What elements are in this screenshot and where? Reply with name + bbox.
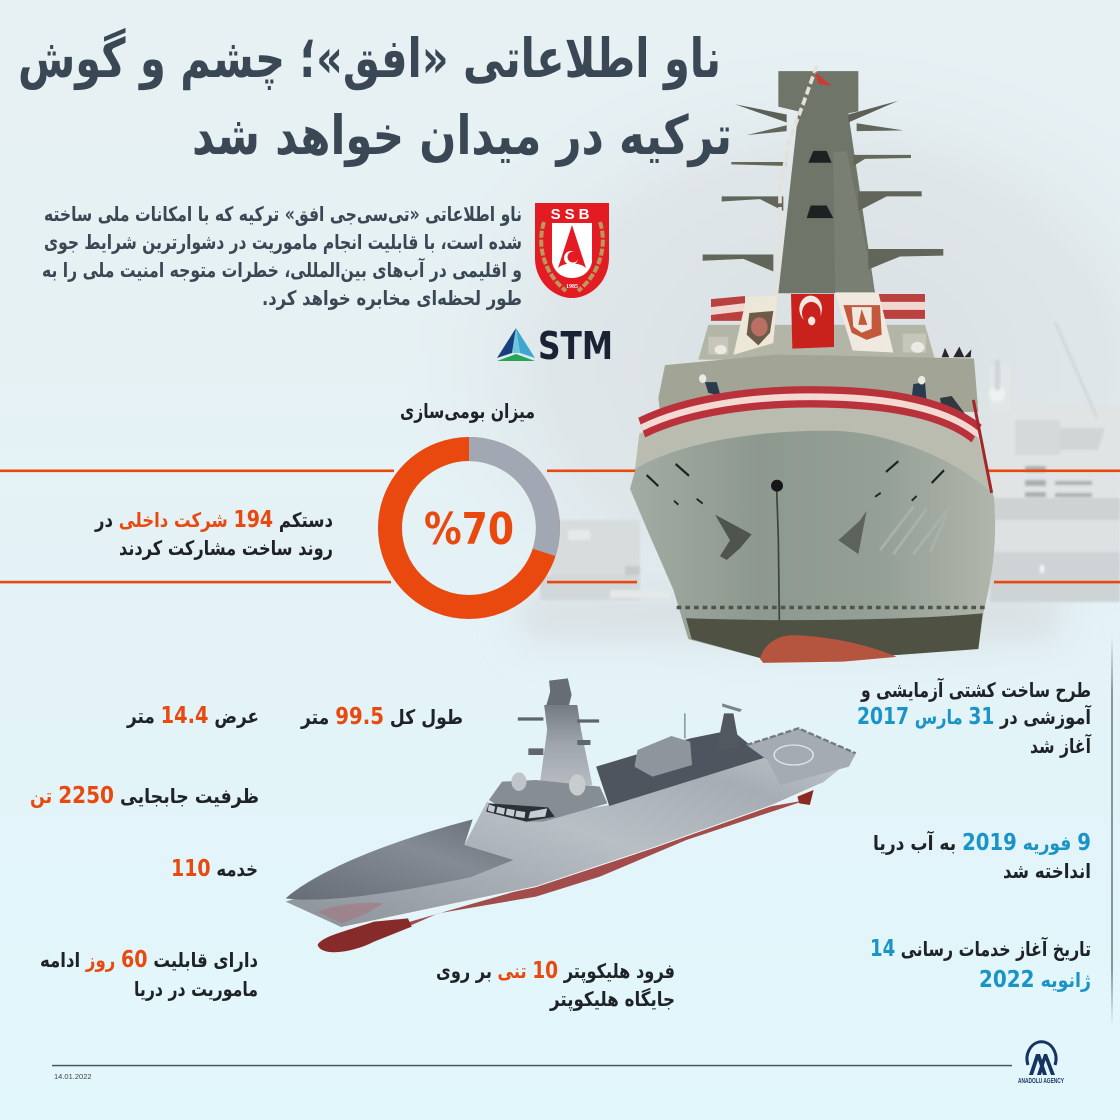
- orange horizontal rules: [0, 470, 1120, 583]
- footer rule: [52, 1065, 1012, 1066]
- logo: Anadolu Agency: ANADOLU AGENCY: [1018, 1078, 1064, 1085]
- dressing flags on mast: [772, 66, 817, 376]
- logo: Anadolu Agency: [1018, 1042, 1064, 1085]
- spec: beam: عرض 14.4 متر: [126, 703, 259, 729]
- boot topping: [686, 613, 983, 659]
- logo: SSB shield: SSB: [551, 206, 593, 223]
- title: ترکیه در میدان خواهد شد: [192, 104, 732, 167]
- bow red tint: [318, 903, 383, 923]
- timeline: construction start: آموزشی در 31 مارس 2017: [857, 704, 1092, 730]
- title: ناو اطلاعاتی «افق»؛ چشم و گوش: [18, 27, 721, 90]
- timeline: launch: [873, 830, 1091, 883]
- main mast: [518, 678, 599, 785]
- hull side: [286, 728, 856, 927]
- upper superstructure: [698, 325, 935, 360]
- spec: overall length: طول کل 99.5 متر: [300, 704, 463, 730]
- red and white rails: [711, 294, 925, 321]
- intro paragraph: ناو اطلاعاتی «تی‌سی‌جی افق» ترکیه که با امکانات ملی ساخته: [44, 202, 522, 226]
- spec: crew: خدمه 110: [171, 856, 258, 882]
- hull: [630, 418, 995, 659]
- spec: helicopter: جایگاه هلیکوپتر: [549, 987, 675, 1012]
- anchors and hawse hole: [715, 480, 867, 560]
- red bulbous bow: [760, 635, 897, 663]
- hull markings: [647, 461, 944, 645]
- spec: displacement: ظرفیت جابجایی 2250 تن: [30, 783, 259, 809]
- hull shoulder band: [635, 406, 992, 493]
- bridge and radome: [486, 772, 607, 822]
- date: 14.01.2022: [54, 1072, 92, 1081]
- banner left: [733, 296, 777, 355]
- timeline: construction start: آغاز شد: [1030, 733, 1092, 758]
- spec: endurance: [40, 947, 258, 1001]
- aft mast with radar: [685, 703, 742, 750]
- intro paragraph: و اقلیمی در آب‌های بین‌المللی، خطرات متوجه امنیت ملی را به: [42, 257, 522, 282]
- timeline: entering service: [870, 936, 1091, 993]
- title: [18, 27, 732, 167]
- red lower hull and bulb: [318, 790, 814, 952]
- timeline: entering service: ژانویه 2022: [979, 967, 1091, 993]
- secondary ship illustration: [286, 678, 856, 952]
- intro paragraph: [42, 202, 522, 310]
- logo: SSB shield: [535, 203, 609, 298]
- small pennant: [815, 72, 832, 86]
- logo: SSB shield: 1985: [566, 284, 578, 290]
- timeline: construction start: [857, 677, 1092, 758]
- crew on deck: [699, 347, 971, 414]
- timeline: launch: انداخته شد: [1003, 859, 1091, 883]
- helideck: [747, 728, 856, 785]
- Turkish flag: [791, 294, 834, 349]
- deck block: [658, 354, 978, 412]
- logo: STM: STM: [538, 324, 613, 368]
- mid deck: [596, 730, 765, 806]
- donut chart: 70 percent: %70: [424, 504, 514, 555]
- background mist and harbour behind ship: [400, 40, 1120, 700]
- intro paragraph: طور لحظه‌ای مخابره خواهد کرد.: [262, 286, 522, 310]
- donut chart: 70 percent: [390, 449, 548, 607]
- timeline divider: [1111, 635, 1113, 1027]
- main ship photo: bow view: [630, 66, 995, 663]
- foredeck: [286, 819, 513, 900]
- mast with spikes: [703, 71, 943, 293]
- hull number: [880, 507, 950, 554]
- spec: endurance: ماموریت در دریا: [134, 977, 258, 1001]
- text: domestic companies: دستکم 194 شرکت داخلی در: [94, 507, 333, 533]
- hangar box: [634, 736, 692, 777]
- logo: STM: [497, 324, 613, 368]
- spec: helicopter: فرود هلیکوپتر 10 تنی بر روی: [436, 958, 675, 984]
- banner right: [835, 292, 893, 353]
- intro paragraph: شده است، با قابلیت انجام ماموریت در دشوارترین شرایط جوی: [44, 230, 522, 254]
- text: domestic companies: [94, 507, 333, 560]
- timeline: launch: 9 فوریه 2019 به آب دریا: [873, 830, 1091, 856]
- spec: helicopter: [436, 958, 675, 1012]
- text: domestic companies: روند ساخت مشارکت کردند: [119, 536, 333, 560]
- spec: endurance: دارای قابلیت 60 روز ادامه: [40, 947, 258, 973]
- donut heading: میزان بومی‌سازی: [400, 399, 535, 423]
- red and white bulwark stripes: [642, 397, 992, 493]
